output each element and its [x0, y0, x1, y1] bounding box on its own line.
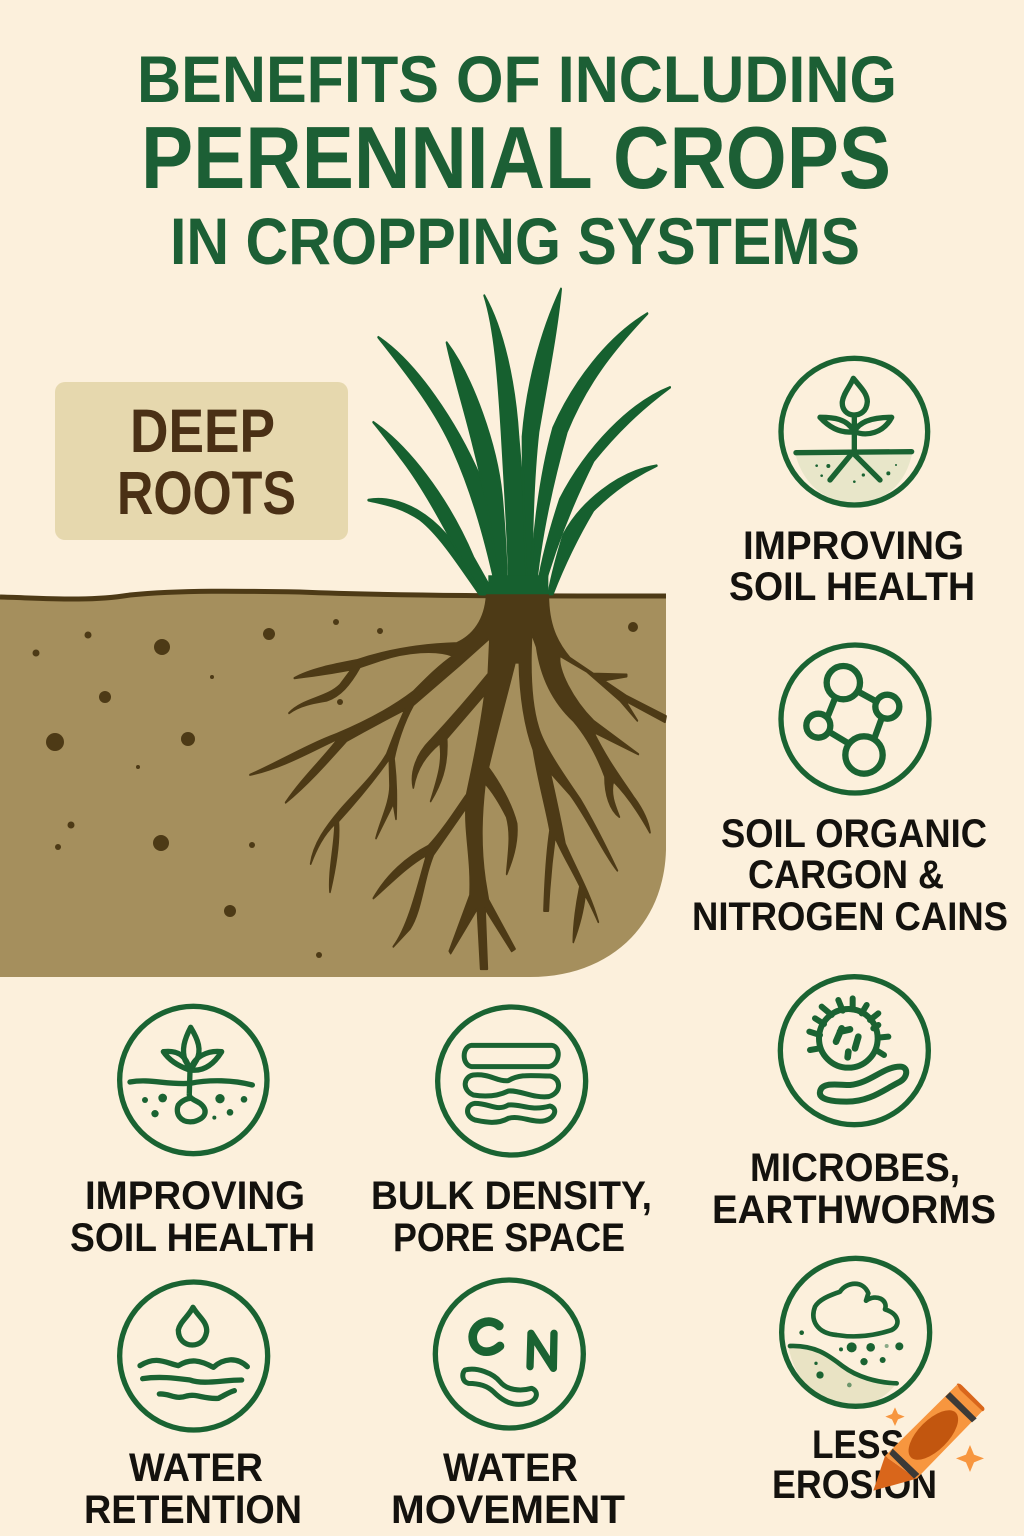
- label: less erosion: [772, 1423, 937, 1507]
- label: soil organic carbon: [692, 812, 1008, 939]
- icon: soil layers: [438, 1007, 586, 1155]
- label: water retention: WATER: [129, 1446, 263, 1490]
- label: bulk density, pore space: [371, 1174, 652, 1260]
- icon: microbes and earthworm: [780, 977, 928, 1125]
- label: microbes, earthworms: EARTHWORMS: [712, 1188, 996, 1232]
- label: improving soil health (right): [729, 524, 975, 609]
- icon: plant with soil (right): [781, 358, 928, 505]
- label: bulk density, pore space: PORE SPACE: [393, 1216, 625, 1260]
- label: improving soil health (bottom): SOIL HEALTH: [70, 1216, 315, 1260]
- callout: deep roots: DEEP: [130, 397, 275, 465]
- label: improving soil health (right): IMPROVING: [743, 524, 964, 568]
- title: [137, 42, 897, 278]
- icon: cloud and erosion: [782, 1258, 930, 1407]
- soil cross-section: [0, 591, 666, 977]
- label: less erosion: EROSION: [772, 1463, 937, 1507]
- label: improving soil health (right): SOIL HEALTH: [729, 565, 975, 609]
- label: microbes, earthworms: [712, 1146, 996, 1232]
- label: water retention: [84, 1446, 302, 1532]
- label: soil organic carbon: CARGON &: [748, 853, 944, 897]
- icon: seedling with soil (bottom): [120, 1006, 267, 1154]
- label: soil organic carbon: SOIL ORGANIC: [721, 812, 987, 856]
- label: improving soil health (bottom): IMPROVING: [85, 1174, 305, 1218]
- callout: deep roots: ROOTS: [117, 459, 296, 527]
- plant leaves: [368, 289, 670, 595]
- label: bulk density, pore space: BULK DENSITY,: [371, 1174, 652, 1218]
- icon: orange crayon with sparkles: [873, 1384, 984, 1491]
- icon: carbon nitrogen: [435, 1280, 583, 1428]
- label: water movement: MOVEMENT: [391, 1488, 625, 1532]
- title: IN CROPPING SYSTEMS: [170, 204, 860, 278]
- label: water movement: [391, 1446, 625, 1532]
- title: BENEFITS OF INCLUDING: [137, 42, 897, 116]
- label: improving soil health (bottom): [70, 1174, 315, 1260]
- title: PERENNIAL CROPS: [141, 108, 891, 207]
- icon: molecule: [781, 645, 929, 793]
- label: microbes, earthworms: MICROBES,: [750, 1146, 960, 1190]
- roots: [250, 595, 666, 969]
- label: water retention: RETENTION: [84, 1488, 302, 1532]
- label: water movement: WATER: [443, 1446, 578, 1490]
- icon: water drop and waves: [120, 1282, 268, 1430]
- callout: deep roots: [55, 382, 348, 540]
- label: less erosion: LESS: [812, 1423, 904, 1467]
